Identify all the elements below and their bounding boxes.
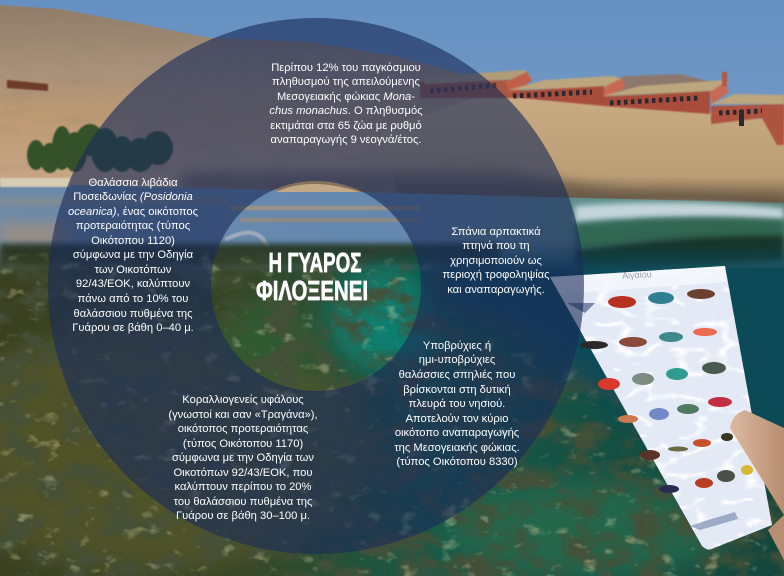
text block: Mediterranean monk seal xyxy=(269,62,423,146)
text block: Posidonia meadows: προτεραιότητας (τύπος xyxy=(76,220,191,232)
concentric ring overlay xyxy=(48,18,584,554)
text block: Mediterranean monk seal: πληθυσμού της απειλούμενης xyxy=(272,76,421,88)
text block: sea caves: θαλάσσιες σπηλιές που xyxy=(399,369,515,381)
text block: sea caves: οικότοπο αναπαραγωγής xyxy=(395,427,520,439)
text block: coralligenous reefs: Κοραλλιογενείς υφάλους xyxy=(182,394,304,406)
center title: Η ΓΥΑΡΟΣ xyxy=(268,247,362,278)
text block: coralligenous reefs: σύμφωνα με την Οδηγία των xyxy=(172,452,314,464)
text block: rare raptors: και αναπαραγωγής. xyxy=(447,284,545,296)
card sheet xyxy=(550,266,772,550)
text block: sea caves: βρίσκονται στη δυτική xyxy=(403,384,511,396)
text block: sea caves: της Μεσογειακής φώκιας. xyxy=(394,442,520,454)
text block: Mediterranean monk seal: Περίπου 12% του παγκόσμιου xyxy=(271,62,421,74)
text block: Posidonia meadows: Ποσειδωνίας (Posidonia xyxy=(73,191,193,203)
text block: rare raptors: περιοχή τροφοληψίας xyxy=(442,269,550,281)
text block: coralligenous reefs: Γυάρου σε βάθη 30–100 μ. xyxy=(176,510,310,522)
text block: coralligenous reefs: καλύπτουν περίπου το 20% xyxy=(175,481,312,493)
text block: coralligenous reefs: Οικοτόπων 92/43/ΕΟΚ, που xyxy=(173,467,313,479)
text block: sea caves xyxy=(394,340,520,468)
fish identification card held underwater xyxy=(540,260,784,560)
fish illustrations xyxy=(567,289,753,493)
text block: Posidonia meadows: θαλάσσιου πυθμένα της xyxy=(73,308,193,320)
red-walled buildings xyxy=(420,70,784,145)
text block: rare raptors: χρησιμοποιούν ως xyxy=(450,255,543,267)
text block: rare raptors: Σπάνια αρπακτικά xyxy=(451,226,541,238)
text block: Posidonia meadows: Γυάρου σε βάθη 0–40 μ. xyxy=(72,322,194,334)
text block: sea caves: πλευρά του νησιού. xyxy=(409,398,505,410)
text block: Posidonia meadows: πάνω από το 10% του xyxy=(78,293,188,305)
text block: Posidonia meadows: 92/43/ΕΟΚ, καλύπτουν xyxy=(76,278,191,290)
text block: sea caves: (τύπος Οικότοπου 8330) xyxy=(396,456,518,468)
cliff below buildings xyxy=(380,96,784,205)
sea surface band xyxy=(0,178,784,275)
text block: sea caves: Αποτελούν τον κύριο xyxy=(406,413,508,425)
text block: Mediterranean monk seal: εκτιμάται στα 65 ζώα με ρυθμό xyxy=(270,120,422,132)
text block: coralligenous reefs xyxy=(168,394,318,522)
text block: coralligenous reefs: του θαλάσσιου πυθμένα της xyxy=(174,496,313,508)
text block: Mediterranean monk seal: αναπαραγωγής 9 νεογνά/έτος. xyxy=(271,134,421,146)
text block: Posidonia meadows: oceanica), ένας οικότοπος xyxy=(68,206,199,218)
dark teal water behind the card xyxy=(720,268,784,433)
card logos strip xyxy=(690,512,738,530)
text block: coralligenous reefs: (γνωστοί και σαν «Τραγάνα»), xyxy=(168,409,318,421)
text block: rare raptors: πτηνά που τη xyxy=(462,240,530,252)
text block: coralligenous reefs: οικότοπος προτεραιότητας xyxy=(178,423,309,435)
building windows xyxy=(430,85,762,113)
text block: Posidonia meadows: Θαλάσσια λιβάδια xyxy=(88,177,178,189)
center title xyxy=(256,247,368,306)
far ridge behind buildings xyxy=(600,74,720,98)
text block: Posidonia meadows: σύμφωνα με την Οδηγία xyxy=(73,249,194,261)
pine trees xyxy=(27,124,173,173)
rock at the waterline xyxy=(276,184,360,192)
dark rock near the waterline xyxy=(180,170,784,206)
text block: coralligenous reefs: (τύπος Οικότοπου 1170) xyxy=(183,438,303,450)
text block: sea caves: Υποβρύχιες ή xyxy=(423,340,491,352)
hand holding the card xyxy=(730,410,784,560)
text block: Mediterranean monk seal: Μεσογειακής φώκιας Mona- xyxy=(277,91,415,103)
text block: sea caves: ημι-υποβρύχιες xyxy=(419,354,496,366)
text block: rare raptors xyxy=(442,226,550,296)
sky xyxy=(0,0,784,205)
text block: Posidonia meadows: Οικότοπου 1120) xyxy=(91,235,175,247)
text block: Posidonia meadows: των Οικοτόπων xyxy=(95,264,172,276)
text block: Posidonia meadows xyxy=(68,177,199,334)
center title: ΦΙΛΟΞΕΝΕΙ xyxy=(256,275,368,306)
card heading: Αιγαίου xyxy=(622,269,652,281)
text block: Mediterranean monk seal: chus monachus. Ο πληθυσμός xyxy=(269,105,423,117)
hillside xyxy=(0,5,540,193)
underwater seabed xyxy=(0,230,784,576)
